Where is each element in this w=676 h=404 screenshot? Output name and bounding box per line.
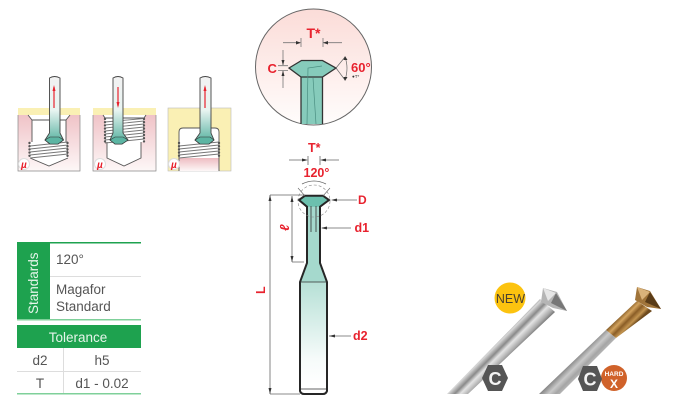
table: tolerance: d1 - 0.02 bbox=[75, 376, 129, 391]
label: l: ℓ bbox=[277, 224, 292, 231]
table: tolerance: h5 bbox=[94, 353, 110, 368]
dimension: T*: T* bbox=[306, 25, 321, 41]
table: tolerance: d2 bbox=[32, 353, 48, 368]
table: standards: 120° bbox=[56, 252, 84, 267]
table: standards: Standard bbox=[56, 299, 111, 314]
table: standards bbox=[17, 242, 141, 320]
dimension: C: C bbox=[268, 61, 278, 76]
panel: tip detail circle: ●T* bbox=[352, 74, 359, 79]
panel: threading diagram 2: µ bbox=[96, 160, 103, 171]
badge: C hexagon bbox=[482, 365, 508, 391]
product image: steel drill bbox=[447, 288, 567, 394]
table: tolerance: T bbox=[36, 376, 44, 391]
panel: threading diagram 2 bbox=[93, 76, 156, 171]
panel: threading diagram 3 bbox=[168, 76, 231, 171]
badge: C hexagon (coated) bbox=[578, 366, 602, 391]
panel: tip detail circle bbox=[256, 9, 372, 125]
dimension: 60°: 60° bbox=[351, 60, 371, 75]
table: standards: Standards bbox=[26, 252, 41, 314]
badge: C hexagon: C bbox=[488, 369, 502, 389]
panel: threading diagram 1 bbox=[18, 76, 80, 171]
label: d2: d2 bbox=[353, 329, 368, 343]
badge: HARD X: X bbox=[610, 377, 618, 391]
label: L: L bbox=[254, 286, 268, 294]
badge: NEW bbox=[494, 282, 526, 314]
badge: NEW: NEW bbox=[496, 292, 525, 306]
table: standards: Magafor bbox=[56, 282, 106, 297]
technical drawing: end mill bbox=[254, 141, 369, 394]
badge: HARD X: HARD bbox=[605, 371, 624, 378]
badge: HARD X bbox=[601, 365, 627, 391]
label: T*: T* bbox=[308, 141, 321, 155]
product image: coated drill bbox=[539, 287, 661, 394]
badge: C hexagon (coated): C bbox=[584, 370, 596, 390]
table: tolerance: Tolerance bbox=[49, 330, 107, 345]
panel: threading diagram 1: µ bbox=[20, 160, 27, 171]
label: D: D bbox=[358, 193, 367, 207]
label: 120°: 120° bbox=[304, 166, 329, 180]
label: d1: d1 bbox=[354, 221, 369, 235]
panel: threading diagram 3: µ bbox=[170, 160, 177, 171]
table: tolerance bbox=[17, 325, 141, 394]
